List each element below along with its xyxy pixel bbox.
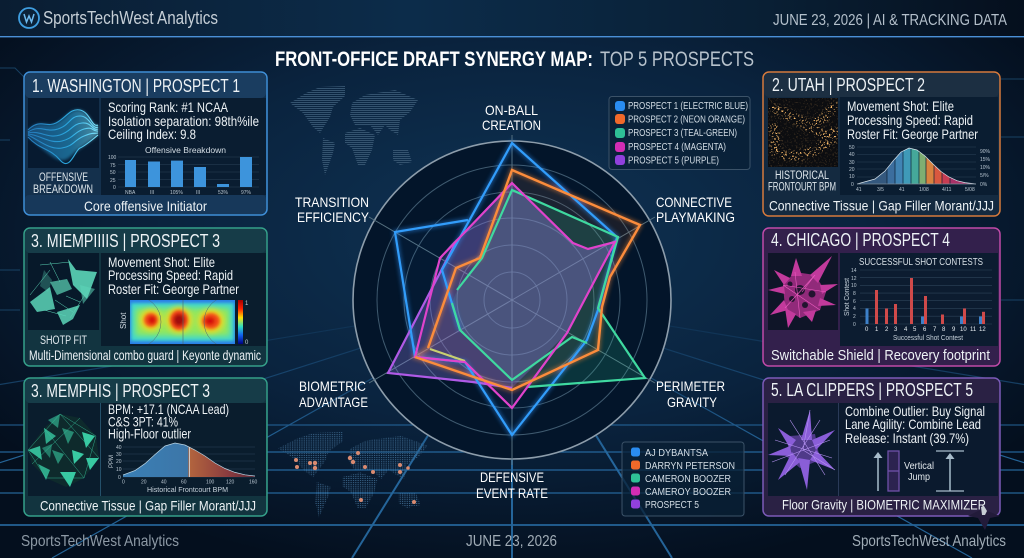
image: teal network — [30, 259, 97, 325]
panel title: 2. UTAH | PROSPECT 2 — [772, 75, 925, 95]
distribution chart: frontcourt bpm: 41 — [899, 187, 905, 193]
axis label: connective playmaking — [656, 194, 735, 225]
bar chart: successful shot contests: 8 — [853, 291, 856, 297]
panel footer: Connective Tissue | Gap Filler Morant/JJJ — [769, 198, 994, 214]
bar chart: offensive breakdown: NBA — [125, 190, 136, 196]
radar chart — [353, 135, 671, 465]
distribution chart: frontcourt bpm: 90% — [980, 149, 991, 155]
distribution chart: historical frontcourt bpm: 0 — [118, 475, 121, 481]
image: teal crystal — [28, 414, 99, 487]
radar fills — [388, 143, 645, 435]
stats text: BPM: +17.1 (NCAA Lead) — [108, 401, 229, 417]
bar chart: successful shot contests: 10 — [851, 283, 857, 289]
stats text: Combine Outlier: Buy Signal — [845, 403, 985, 419]
stats text: Processing Speed: Rapid — [847, 112, 973, 128]
stats text — [108, 99, 259, 142]
image caption: SHOTP FIT — [40, 335, 87, 347]
stats text: Movement Shot: Elite — [108, 254, 215, 270]
distribution chart: historical frontcourt bpm: Historical Frontcourt BPM — [147, 487, 228, 494]
bar chart: successful shot contests: Shot Contest — [842, 277, 851, 316]
bar chart: successful shot contests: 4 — [904, 327, 908, 333]
bar chart: offensive breakdown: Offensive Breakdown — [145, 146, 226, 155]
image: data wave — [28, 98, 99, 168]
distribution chart: frontcourt bpm: 3/5 — [877, 187, 884, 193]
distribution chart: historical frontcourt bpm: 0 — [122, 480, 125, 486]
image caption: HISTORICAL — [775, 170, 829, 182]
legend: player names: CAMERON BOOZER — [645, 474, 731, 485]
bar chart: successful shot contests: 12 — [979, 327, 986, 333]
axis label: transition efficiency: EFFICIENCY — [297, 209, 370, 225]
bar chart: offensive breakdown: 50 — [110, 170, 116, 176]
axis label: transition efficiency — [295, 194, 370, 225]
panel title: 3. MEMPHIS | PROSPECT 3 — [31, 381, 210, 401]
image: magenta spiky form — [768, 256, 838, 328]
image caption — [768, 170, 836, 194]
legend: player names: AJ DYBANTSA — [645, 448, 708, 459]
bar chart: successful shot contests: 6 — [853, 299, 856, 305]
panel footer: Multi-Dimensional combo guard | Keyonte dynamic — [29, 347, 261, 363]
bar chart: successful shot contests: 12 — [851, 276, 857, 282]
distribution chart: historical frontcourt bpm: 40 — [161, 480, 167, 486]
distribution chart: frontcourt bpm — [849, 145, 991, 193]
distribution chart: frontcourt bpm: 4/11 — [942, 187, 952, 193]
axis label: biometric advantage: BIOMETRIC — [299, 378, 366, 394]
bar chart: successful shot contests: 6 — [923, 327, 927, 333]
distribution chart: frontcourt bpm: 10 — [849, 174, 855, 180]
bar chart: offensive breakdown: 100 — [108, 155, 117, 161]
bar chart: offensive breakdown: 25 — [110, 178, 116, 184]
axis label: defensive event rate — [476, 469, 548, 501]
bar chart: offensive breakdown: 97% — [241, 190, 252, 196]
bar chart: offensive breakdown — [108, 146, 259, 196]
header: logo and brand: SportsTechWest Analytics — [43, 8, 218, 28]
heatmap: shot density — [120, 300, 248, 344]
series: prospect 5 — [388, 240, 512, 388]
stats text: High-Floor outlier — [108, 426, 191, 442]
legend: player names: CAMEROY BOOZER — [645, 487, 731, 498]
axis label: biometric advantage — [299, 378, 368, 410]
bar chart: successful shot contests: 4 — [853, 306, 856, 312]
diagram: vertical jump — [874, 451, 964, 491]
bar chart: successful shot contests: 14 — [851, 268, 857, 274]
distribution chart: historical frontcourt bpm: 20 — [116, 459, 122, 465]
axis label: on-ball creation — [482, 102, 541, 133]
bar chart: successful shot contests: Successful Shot Contest — [893, 335, 963, 342]
heatmap: shot density: 1 — [245, 301, 249, 307]
footer: date: JUNE 23, 2026 — [466, 533, 557, 550]
axis label: defensive event rate: DEFENSIVE — [480, 469, 544, 485]
title: FRONT-OFFICE DRAFT SYNERGY MAP: — [275, 48, 593, 71]
distribution chart: frontcourt bpm: 41 — [856, 187, 862, 193]
panel: miempiiiis prospect 3 — [24, 228, 267, 366]
radar glow — [395, 143, 640, 435]
heatmap: shot density: Shot — [119, 312, 128, 329]
bar chart: successful shot contests: 0 — [853, 322, 856, 328]
bar chart: successful shot contests: 3 — [894, 327, 898, 333]
distribution chart: historical frontcourt bpm: 40 — [116, 445, 122, 451]
legend: prospects by colour: PROSPECT 1 (ELECTRIC BLUE) — [628, 101, 748, 112]
distribution chart: frontcourt bpm: 5/08 — [965, 187, 975, 193]
axis label: connective playmaking: PLAYMAKING — [656, 209, 735, 225]
distribution chart: frontcourt bpm: 0% — [980, 182, 988, 188]
distribution chart: frontcourt bpm: 30 — [849, 160, 855, 166]
distribution chart: frontcourt bpm: 40 — [849, 152, 855, 158]
stats text: Processing Speed: Rapid — [108, 267, 233, 283]
distribution chart: historical frontcourt bpm: 60 — [181, 480, 187, 486]
image caption — [33, 172, 93, 196]
stats text: C&S 3PT: 41% — [108, 414, 178, 430]
distribution chart: frontcourt bpm: 50 — [849, 145, 855, 151]
axis label: defensive event rate: EVENT RATE — [476, 485, 548, 501]
image caption: BREAKDOWN — [33, 184, 93, 196]
distribution chart: frontcourt bpm: 0 — [851, 182, 854, 188]
panel: washington prospect 1 — [24, 72, 267, 215]
image caption: FRONTOURT BPM — [768, 182, 836, 194]
axis label: perimeter gravity: GRAVITY — [667, 394, 718, 410]
legend: player names: DARRYN PETERSON — [645, 461, 735, 472]
stats text — [108, 401, 229, 442]
world map: bottom with hotspots — [278, 432, 428, 517]
legend: prospects by colour: PROSPECT 2 (NEON ORANGE) — [628, 114, 745, 126]
distribution chart: historical frontcourt bpm — [109, 443, 258, 494]
legend: prospects by colour — [609, 96, 750, 170]
stats text: Release: Instant (39.7%) — [845, 430, 969, 446]
icon: cursor smudge — [968, 506, 1000, 530]
bar chart: offensive breakdown: III — [150, 190, 154, 196]
image: purple star — [768, 410, 835, 490]
stats text: Lane Agility: Combine Lead — [845, 416, 981, 432]
axis label: perimeter gravity: PERIMETER — [656, 378, 725, 394]
stats text: Movement Shot: Elite — [847, 98, 954, 114]
panel title: 3. MIEMPIIIIS | PROSPECT 3 — [31, 231, 220, 251]
stats text: Isolation separation: 98th%ile — [108, 113, 259, 129]
panel footer: Core offensive Initiator — [84, 198, 207, 214]
axis label: transition efficiency: TRANSITION — [295, 194, 369, 210]
stats text: Roster Fit: George Partner — [108, 281, 239, 297]
distribution chart: historical frontcourt bpm: PPM — [109, 455, 115, 468]
panel: la clippers prospect 5 — [763, 378, 1000, 516]
stats text — [108, 254, 239, 297]
world map: top stripes — [290, 86, 418, 175]
legend: prospects by colour: PROSPECT 4 (MAGENTA) — [628, 142, 726, 153]
bar chart: offensive breakdown: 0 — [113, 185, 116, 191]
distribution chart: frontcourt bpm: 15% — [980, 157, 991, 163]
title: TOP 5 PROSPECTS — [600, 48, 754, 71]
footer: brand left: SportsTechWest Analytics — [21, 533, 179, 550]
stats text: Ceiling Index: 9.8 — [108, 126, 196, 142]
distribution chart: historical frontcourt bpm: 120 — [226, 480, 235, 486]
axis label: perimeter gravity — [656, 378, 725, 410]
axis label: on-ball creation: ON-BALL — [485, 102, 538, 118]
stats text — [845, 403, 985, 446]
distribution chart: historical frontcourt bpm: 30 — [116, 452, 122, 458]
image: orange tracking points — [768, 98, 838, 167]
bar chart: successful shot contests: 0 — [865, 327, 869, 333]
legend: prospects by colour: PROSPECT 3 (TEAL-GREEN) — [628, 128, 737, 139]
axis label: on-ball creation: CREATION — [482, 117, 541, 133]
stats text: Roster Fit: George Partner — [847, 126, 978, 142]
series: prospect 3 — [430, 190, 645, 387]
axis label: biometric advantage: ADVANTAGE — [299, 394, 368, 410]
panel title: 4. CHICAGO | PROSPECT 4 — [771, 230, 950, 250]
distribution chart: historical frontcourt bpm: 160 — [249, 480, 258, 486]
panel: utah prospect 2 — [763, 72, 1000, 216]
bar chart: successful shot contests: 8 — [942, 327, 946, 333]
bar chart: offensive breakdown: 75 — [110, 163, 116, 169]
bar chart: successful shot contests: 1 — [875, 327, 879, 333]
bar chart: offensive breakdown: 105% — [170, 190, 183, 196]
distribution chart: frontcourt bpm: 1/08 — [919, 187, 929, 193]
axis label: connective playmaking: CONNECTIVE — [656, 194, 732, 210]
bar chart: successful shot contests: SUCCESSFUL SHOT CONTESTS — [859, 257, 983, 268]
bar chart: successful shot contests — [842, 257, 992, 342]
bar chart: offensive breakdown: 53% — [218, 190, 229, 196]
legend: player names — [622, 442, 744, 516]
distribution chart: frontcourt bpm: 10% — [980, 165, 991, 171]
panel: chicago prospect 4 — [763, 228, 1000, 366]
bar chart: successful shot contests: 2 — [885, 327, 889, 333]
panel footer: Connective Tissue | Gap Filler Morant/JJJ — [40, 498, 256, 514]
distribution chart: historical frontcourt bpm: 100 — [206, 480, 215, 486]
bar chart: successful shot contests: 10 — [960, 327, 967, 333]
stats text: Scoring Rank: #1 NCAA — [108, 99, 229, 115]
bar chart: successful shot contests: 11 — [970, 327, 977, 333]
panel footer: Switchable Shield | Recovery footprint — [771, 347, 991, 364]
distribution chart: frontcourt bpm: 5/% — [980, 173, 989, 179]
diagram: vertical jump: Jump — [908, 472, 930, 483]
series: prospect 1 — [395, 143, 617, 435]
legend: player names: PROSPECT 5 — [645, 500, 699, 511]
bar chart: successful shot contests: 9 — [952, 327, 956, 333]
bar chart: successful shot contests: 2 — [853, 314, 856, 320]
panel: memphis prospect 3 — [24, 378, 267, 516]
distribution chart: historical frontcourt bpm: 10 — [116, 467, 122, 473]
stats text — [847, 98, 978, 142]
heatmap: shot density: 0 — [245, 340, 249, 346]
diagram: vertical jump: Vertical — [904, 461, 934, 472]
distribution chart: historical frontcourt bpm: 20 — [141, 480, 147, 486]
bar chart: successful shot contests: 7 — [933, 327, 937, 333]
panel title: 1. WASHINGTON | PROSPECT 1 — [32, 76, 240, 96]
distribution chart: frontcourt bpm: 20 — [849, 167, 855, 173]
series: prospect 4 — [415, 183, 615, 408]
legend: prospects by colour: PROSPECT 5 (PURPLE) — [628, 156, 719, 166]
bar chart: offensive breakdown: III — [196, 190, 200, 196]
series: prospect 2 — [415, 170, 640, 390]
image caption: OFFENSIVE — [39, 172, 88, 184]
bar chart: successful shot contests: 5 — [913, 327, 917, 333]
